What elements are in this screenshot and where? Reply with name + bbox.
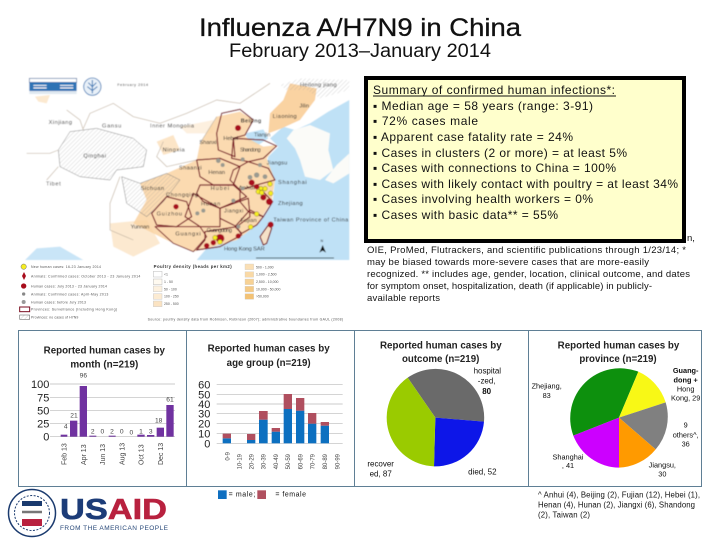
bar value labels: 96: [80, 372, 87, 379]
pie slices: [387, 369, 484, 466]
map: province outlines in dark red: [152, 109, 277, 252]
bar value labels: 21: [70, 413, 78, 420]
map: province labels: Shaanxi: [179, 165, 202, 171]
summary bullet list: [373, 99, 678, 222]
gridlines and y axis labels: 50: [198, 389, 210, 401]
pie labels: Kong, 29: [671, 393, 700, 402]
map: province labels: Hubei: [211, 186, 229, 192]
gridlines and y axis labels: 50: [37, 405, 49, 417]
gridlines and y axis labels: [198, 379, 343, 450]
map: province labels: Heilong jiang: [300, 83, 337, 89]
pie labels: dong +: [674, 375, 698, 384]
month axis labels: Aug 13: [119, 443, 126, 465]
map: province labels: Guangxi: [175, 231, 201, 237]
age axis labels: 80-89: [323, 453, 329, 469]
legend: male and female: = male;: [229, 492, 255, 499]
legend: poultry density: 2,500 - 10,000: [256, 280, 279, 284]
legend: poultry density: >50,000: [256, 295, 269, 299]
map: province labels: Shanghai: [278, 180, 307, 186]
map: province labels: Qinghai: [83, 153, 106, 159]
source note text: recognized. ** includes age, gender, location, clinical outcome, and dates: [367, 269, 690, 280]
map: hatched excluded areas: [58, 78, 349, 217]
pie labels: Shanghai: [553, 453, 584, 462]
source note text: [367, 233, 695, 304]
chart heading: age group (n=219): [227, 358, 311, 369]
pie labels: 83: [543, 391, 551, 400]
age axis labels: 90-99: [335, 453, 341, 469]
icon: north arrow and scale bar: N: [321, 239, 324, 243]
icon: FAO logo: [84, 78, 101, 95]
map: province labels: Guangdong: [207, 228, 232, 234]
footnote: other provinces: Henan (4), Hunan (2), Jiangxi (6), Shandong: [538, 500, 695, 510]
logo: USAID: [8, 490, 169, 536]
map: province labels: Hong Kong SAR: [224, 246, 265, 252]
legend: case symbols: New human cases: 16-23 January 2014: [31, 265, 101, 269]
bar chart: cases by age group: [198, 343, 343, 469]
map: grey earlier case dots: [195, 157, 267, 229]
bar value labels: 0: [100, 428, 104, 435]
gridlines and y axis labels: [31, 379, 175, 444]
month axis labels: Apr 13: [81, 444, 88, 465]
map: province labels: Hebei: [223, 136, 238, 142]
pie labels: , 41: [562, 461, 574, 470]
title: Influenza A/H7N9 in China: [199, 14, 521, 42]
pie labels: 30: [658, 470, 666, 479]
gridlines and y axis labels: 10: [198, 428, 210, 440]
pie labels: 36: [682, 439, 690, 448]
map: province labels: Jiangxi: [224, 208, 243, 214]
map: province labels: Ningxia: [163, 147, 186, 153]
map panel: [25, 77, 350, 260]
bar value labels: 61: [166, 396, 174, 403]
legend: poultry density: <1: [164, 273, 168, 277]
month axis labels: Feb 13: [62, 443, 69, 465]
month axis labels: [62, 443, 165, 465]
legend: case symbols: Human cases: July 2013 - 23 January 2014: [31, 284, 107, 288]
summary bullet list: ▪ Median age = 58 years (range: 3-91): [373, 99, 593, 113]
legend: poultry density: 100 - 250: [164, 295, 179, 299]
pie labels: [367, 367, 501, 479]
legend: poultry density: 250 - 500: [164, 302, 179, 306]
gridlines and y axis labels: 25: [37, 419, 49, 431]
map: province labels: Jilin: [299, 104, 309, 110]
summary bullet list: ▪ Cases with likely contact with poultry = at least 34%: [373, 177, 678, 191]
summary bullet list: ▪ Cases involving health workers = 0%: [373, 192, 593, 206]
map: province labels: February 2014: [117, 83, 148, 87]
pie labels: Jiangsu,: [649, 461, 676, 470]
map: province labels: Shanxi: [199, 140, 217, 146]
legend: case symbols: Provinces: no cases of H7N9: [31, 315, 78, 319]
pie labels: Hong: [677, 385, 694, 394]
summary bullet list: ▪ Cases with connections to China = 100%: [373, 161, 616, 175]
chart heading: outcome (n=219): [402, 354, 479, 365]
footnote: other provinces: [538, 490, 700, 520]
pie labels: ed, 87: [370, 470, 392, 479]
footnote: other provinces: (2), Taiwan (2): [538, 510, 590, 520]
pie labels: -zed,: [478, 377, 496, 386]
pie labels: recover: [367, 460, 394, 469]
age axis labels: 60-69: [298, 453, 304, 469]
summary bullet list: ▪ Apparent case fatality rate = 24%: [373, 130, 573, 144]
icon: EMPRES logo: [29, 78, 77, 94]
chart heading: month (n=219): [70, 359, 138, 370]
pie labels: Zhejiang,: [532, 382, 562, 391]
map: province labels: Liaoning: [273, 114, 297, 120]
source note text: n,: [687, 233, 695, 244]
gridlines and y axis labels: 20: [198, 419, 210, 431]
legend: male and female: = female: [275, 492, 306, 499]
legend: poultry density: 50 - 100: [164, 287, 177, 291]
logo wordmark: US AID: [60, 494, 167, 526]
bars: [61, 386, 174, 437]
gridlines and y axis labels: 75: [37, 392, 49, 404]
age axis labels: 40-49: [274, 453, 280, 469]
month axis labels: Dec 13: [158, 443, 165, 465]
summary bullet list: ▪ Cases with basic data** = 55%: [373, 208, 558, 222]
map: yellow new case dots: [213, 182, 273, 244]
map: province labels: Beijing: [241, 119, 262, 125]
bar value labels: 2: [91, 428, 95, 435]
summary bullet list: ▪ 72% cases male: [373, 114, 478, 128]
age axis labels: 10-19: [238, 453, 244, 469]
map: province labels: Jiangsu: [267, 161, 287, 167]
icon: north arrow and scale bar: [256, 239, 334, 258]
legend: male and female: [218, 490, 306, 499]
subtitle: February 2013–January 2014: [229, 41, 491, 62]
chart heading: [558, 340, 680, 365]
age axis labels: 0-9: [225, 451, 231, 461]
map: province labels: Fujian: [241, 218, 257, 224]
map: province labels: Xinjiang: [49, 120, 72, 126]
legend: case symbols: Provinces: Surveillance (Including Hong Kong): [31, 308, 117, 312]
legend: case symbols: Human cases: before July 2013: [31, 300, 86, 304]
legend: case symbols: [20, 264, 140, 319]
gridlines and y axis labels: 60: [198, 379, 210, 391]
female bars: [223, 394, 329, 440]
map: province labels: Taiwan Province of China: [273, 217, 349, 223]
month axis labels: Oct 13: [139, 444, 146, 465]
age axis labels: 30-39: [262, 453, 268, 469]
gridlines and y axis labels: 40: [198, 399, 210, 411]
footnote: other provinces: ^ Anhui (4), Beijing (2), Fujian (12), Hebei (1),: [538, 490, 700, 500]
bar value labels: 2: [110, 428, 114, 435]
map: province labels: Yunnan: [131, 225, 149, 231]
pie labels: died, 52: [468, 468, 497, 477]
gridlines and y axis labels: 30: [198, 409, 210, 421]
age axis labels: 50-59: [286, 453, 292, 469]
logo tagline: FROM THE AMERICAN PEOPLE: [60, 525, 169, 532]
bar value labels: 1: [139, 428, 143, 435]
bar value labels: 4: [64, 423, 68, 430]
legend: poultry density: 500 - 1,000: [256, 265, 274, 269]
panel: chart frame: [18, 330, 702, 486]
pie labels: 80: [482, 387, 492, 396]
gridlines and y axis labels: 100: [31, 379, 49, 391]
map: province labels: Sichuan: [141, 186, 164, 192]
summary bullet list: ▪ Cases in clusters (2 or more) = at least 5%: [373, 146, 627, 160]
map: province labels: Hunan: [201, 202, 220, 208]
bar value labels: [64, 372, 174, 437]
map: province labels: Gansu: [102, 123, 121, 129]
pie slices: [570, 368, 668, 468]
age axis labels: [225, 451, 341, 469]
pie labels: Guang-: [673, 366, 699, 375]
source note text: OIE, ProMed, Flutrackers, and scientific publications through 1/23/14; *: [367, 245, 686, 256]
chart heading: [44, 345, 165, 370]
legend: case symbols: Animals: Confirmed cases: October 2013 - 23 January 2014: [31, 275, 140, 279]
gridlines and y axis labels: 0: [43, 432, 49, 444]
bar value labels: 18: [155, 417, 163, 424]
map: province labels: Tianjin: [254, 133, 270, 139]
map: province labels: Anhui: [239, 185, 255, 191]
map: province labels: [46, 83, 349, 252]
map: poultry density shading: [35, 83, 317, 257]
legend: poultry density: 1,000 - 2,500: [256, 273, 277, 277]
legend: poultry density: 10,000 - 50,000: [256, 287, 280, 291]
summary heading: Summary of confirmed human infections*:: [373, 83, 615, 97]
map: provincial borders: [27, 83, 270, 240]
chart heading: province (n=219): [579, 354, 657, 365]
month axis labels: Jun 13: [100, 444, 107, 465]
map: province labels: Tibet: [46, 181, 61, 187]
chart heading: [208, 343, 330, 369]
legend: poultry density: [153, 264, 280, 307]
legend: poultry density: 1 - 50: [164, 280, 173, 284]
chart heading: [380, 340, 502, 365]
bar chart: cases by month: [31, 345, 175, 465]
map: sea and land base: [25, 77, 350, 260]
chart heading: Reported human cases by: [380, 340, 502, 351]
panel: summary box: [366, 78, 684, 241]
chart heading: Reported human cases by: [44, 345, 165, 356]
male bars: [223, 409, 329, 443]
pie labels: [532, 366, 700, 479]
map: province labels: Zhejiang: [278, 201, 303, 207]
bar value labels: 0: [129, 430, 133, 437]
map: province labels: Shandong: [240, 147, 261, 153]
legend: case symbols: Animals: Confirmed cases: April-May 2013: [31, 292, 108, 296]
map: province labels: Henan: [208, 170, 225, 176]
source note text: available reports: [367, 293, 440, 304]
source note text: may be biased towards more-severe cases that are more-easily: [367, 257, 649, 268]
age axis labels: 20-29: [249, 453, 255, 469]
bar value labels: 0: [120, 428, 124, 435]
map: province labels: Chongqing: [166, 193, 198, 199]
pie labels: hospital: [474, 367, 501, 376]
legend: poultry density: Poultry density (heads per km2): [154, 264, 232, 269]
chart heading: Reported human cases by: [558, 340, 680, 351]
pie chart: cases by outcome: [367, 340, 502, 479]
legend: source note: Source: poultry density data from Robinson, Robinson (2007); administrative boundaries from GAUL (2008): [148, 318, 343, 322]
map: province labels: Inner Mongolia: [150, 123, 195, 129]
pie chart: cases by province: [532, 340, 700, 479]
pie labels: others^,: [673, 431, 699, 440]
chart heading: Reported human cases by: [208, 343, 330, 354]
bar value labels: 3: [149, 428, 153, 435]
icon: USAID seal: [8, 490, 56, 536]
map legend: [20, 264, 343, 322]
gridlines and y axis labels: 0: [204, 438, 210, 450]
age axis labels: 70-79: [310, 453, 316, 469]
map: province labels: Guizhou: [157, 211, 182, 217]
pie labels: 9: [684, 420, 688, 429]
source note text: for symptom onset, hospitalization, death (if applicable) in publicly-: [367, 281, 652, 292]
map: red case dots: [173, 125, 274, 248]
